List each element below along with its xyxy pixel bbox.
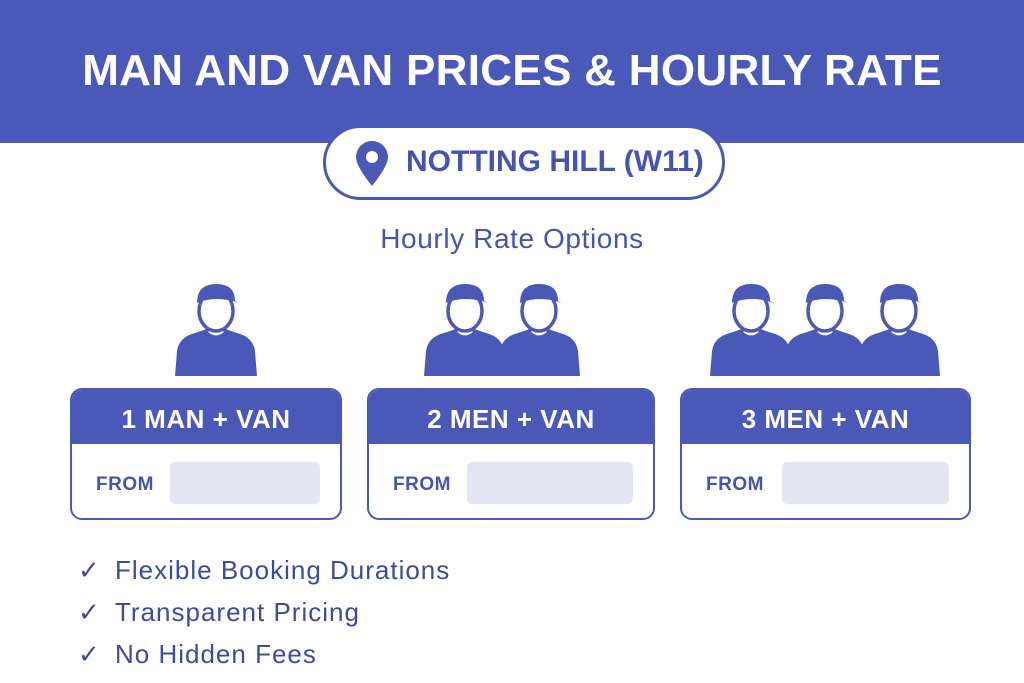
feature 2: ✓ — [78, 597, 101, 627]
card: 3 men: FROM — [706, 474, 764, 495]
location text: NOTTING HILL (W11) — [406, 145, 704, 178]
card: 1 man: 1 MAN + VAN — [122, 404, 290, 434]
feature 2: Transparent Pricing — [115, 597, 360, 627]
subtitle: Hourly Rate Options — [380, 223, 644, 254]
card: 1 man — [70, 388, 342, 520]
card: 2 men: 2 MEN + VAN — [427, 404, 595, 434]
icon: two men — [424, 284, 580, 376]
card: 3 men — [680, 388, 971, 520]
icon: one man — [175, 284, 257, 376]
title: MAN AND VAN PRICES & HOURLY RATE — [82, 46, 942, 95]
card: 3 men: 3 MEN + VAN — [742, 404, 909, 434]
header band — [0, 0, 1024, 143]
feature list — [78, 555, 450, 669]
feature 3: No Hidden Fees — [115, 639, 317, 669]
feature 3: ✓ — [78, 639, 101, 669]
icon: three men — [710, 284, 940, 376]
feature 1: ✓ — [78, 555, 101, 585]
feature 1: Flexible Booking Durations — [115, 555, 450, 585]
card: 2 men — [367, 388, 655, 520]
card: 1 man: FROM — [96, 474, 154, 495]
location pill — [323, 125, 725, 200]
icon: map pin — [356, 141, 388, 186]
card: 2 men: FROM — [393, 474, 451, 495]
